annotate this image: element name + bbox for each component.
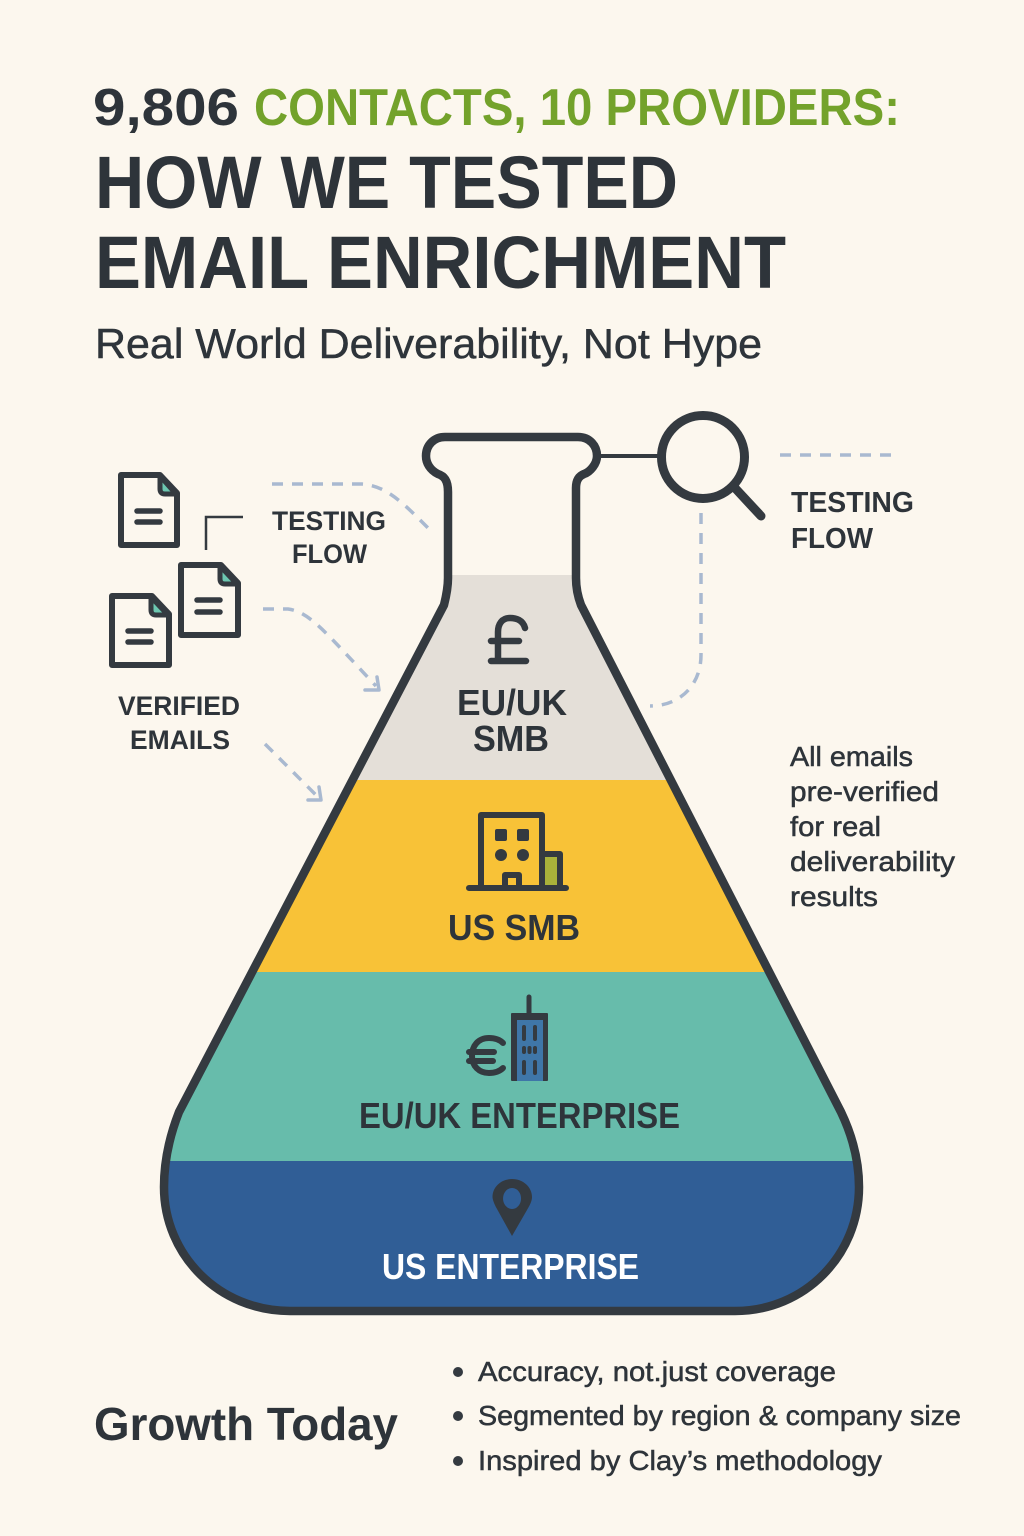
- note: all emails pre-verified: All emails: [790, 741, 913, 772]
- bullet list: Inspired by Clay’s methodology: [478, 1445, 882, 1476]
- label: verified emails: [118, 691, 240, 755]
- arrow: dashed to EU/UK SMB: [263, 609, 379, 690]
- title line 2: HOW WE TESTED: [95, 141, 678, 224]
- title line 1: 9,806: [93, 79, 239, 137]
- label: testing flow right: TESTING: [791, 487, 914, 519]
- note: all emails pre-verified: results: [790, 881, 878, 912]
- label: EU/UK SMB: SMB: [473, 718, 549, 759]
- icon: document middle: [181, 565, 238, 635]
- label: EU/UK SMB: [457, 682, 567, 759]
- label: US SMB: US SMB: [448, 907, 580, 948]
- title line 3: EMAIL ENRICHMENT: [95, 221, 786, 304]
- label: testing flow left: [272, 506, 386, 569]
- flask: [150, 437, 874, 1316]
- label: EU/UK enterprise: EU/UK ENTERPRISE: [359, 1095, 680, 1136]
- icon: document top: [121, 475, 177, 545]
- label: testing flow left: FLOW: [292, 539, 367, 569]
- flask layer: EU/UK SMB: [358, 575, 666, 780]
- dashed line: above testing flow right: [780, 453, 898, 457]
- note: all emails pre-verified: pre-verified: [790, 776, 939, 807]
- connector: flask to magnifier: [600, 454, 658, 458]
- note: all emails pre-verified: for real: [790, 811, 881, 842]
- flask layer: US SMB: [257, 780, 764, 972]
- label: EU/UK SMB: EU/UK: [457, 682, 567, 723]
- label: verified emails: VERIFIED: [118, 691, 240, 721]
- flask layer: EU/UK enterprise: [150, 972, 874, 1161]
- label: verified emails: EMAILS: [130, 725, 230, 755]
- note: all emails pre-verified: [790, 741, 955, 912]
- label: US enterprise: US ENTERPRISE: [382, 1246, 639, 1287]
- arrow: dashed to US SMB: [265, 744, 321, 800]
- arrow: dashed to flask neck: [272, 484, 432, 532]
- brand: Growth Today: Growth Today: [94, 1398, 398, 1450]
- connector: documents to testing flow: [206, 517, 243, 550]
- bullet list: Segmented by region & company size: [478, 1400, 961, 1431]
- flask layer: US enterprise: [168, 1161, 855, 1307]
- icon: location pin: [492, 1179, 532, 1236]
- title line 1: CONTACTS, 10 PROVIDERS:: [254, 79, 900, 137]
- subtitle: Real World Deliverability, Not Hype: [95, 320, 762, 367]
- label: testing flow right: [791, 487, 914, 555]
- icon: pound: [491, 618, 526, 661]
- bullet list: [453, 1356, 961, 1476]
- bullet list: Accuracy, not.just coverage: [478, 1356, 836, 1387]
- icon: document bottom: [112, 596, 169, 665]
- flask outline: [164, 437, 859, 1311]
- icon: small building: [469, 815, 566, 888]
- note: all emails pre-verified: deliverability: [790, 846, 955, 877]
- icon: magnifying glass: [662, 416, 761, 516]
- icon: euro and tower: [469, 997, 548, 1081]
- label: testing flow left: TESTING: [272, 506, 386, 536]
- title: [93, 79, 900, 304]
- dashed line: magnifier to flask: [650, 513, 701, 706]
- label: testing flow right: FLOW: [791, 523, 874, 555]
